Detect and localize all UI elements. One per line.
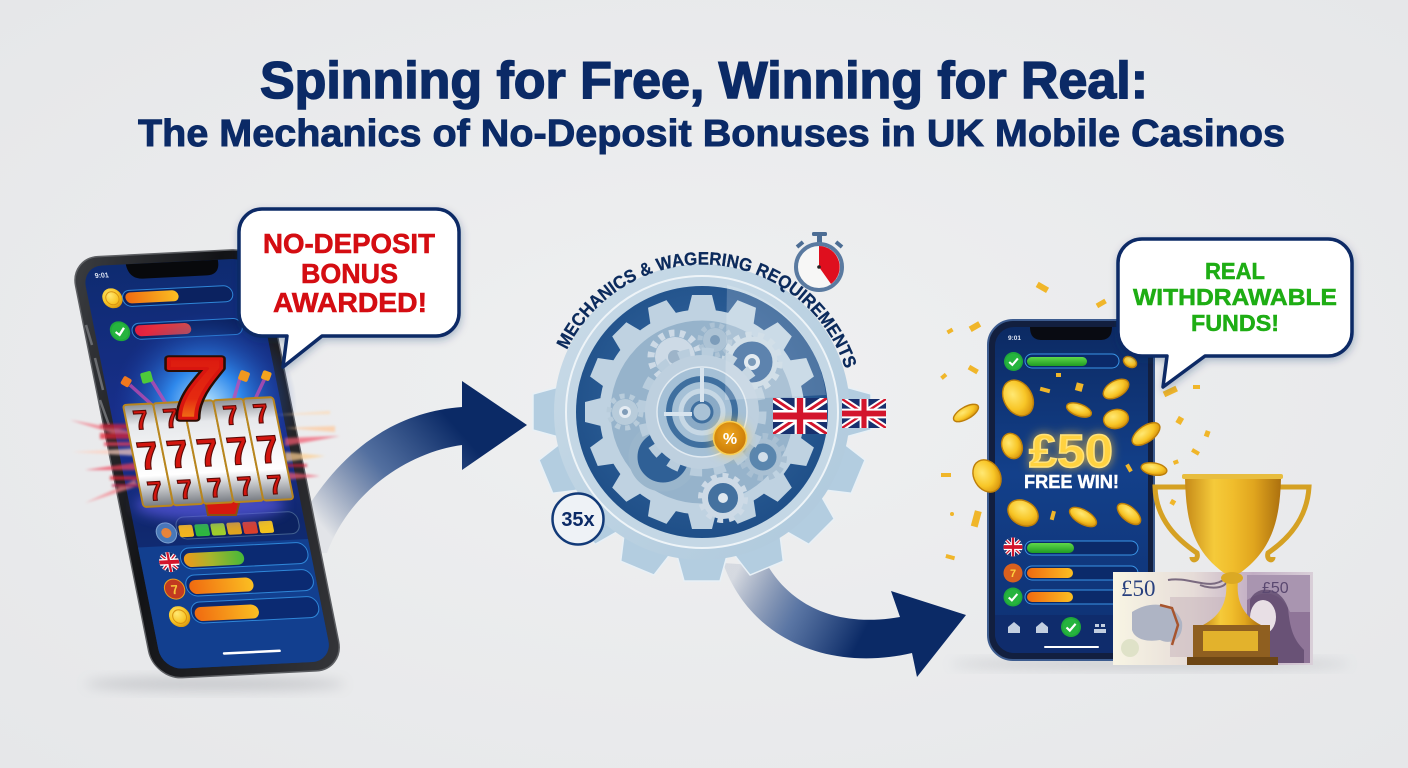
title line 1: Spinning for Free, Winning for Real: xyxy=(260,52,1148,110)
row: UK progress xyxy=(157,542,310,573)
gear bottom xyxy=(701,476,745,520)
big seven: 7 xyxy=(164,341,226,437)
notch xyxy=(1030,327,1112,340)
trophy cup xyxy=(1185,478,1281,573)
fruit tiles xyxy=(120,370,272,412)
trophy base xyxy=(1193,625,1270,658)
bubble text: FUNDS! xyxy=(1191,310,1279,336)
trophy plinth xyxy=(1187,657,1278,665)
reel sevens: 7 xyxy=(133,434,164,479)
banknote xyxy=(1113,572,1313,665)
row: seven progress: 7 xyxy=(170,582,180,597)
note map illustration xyxy=(1121,605,1182,657)
row: check progress xyxy=(108,315,244,342)
reel sevens: 7 xyxy=(205,472,226,503)
gear lower left xyxy=(633,427,693,487)
title line 2: The Mechanics of No-Deposit Bonuses in UK Mobile Casinos xyxy=(138,113,1285,155)
phone screen xyxy=(995,327,1148,653)
reel sevens: 7 xyxy=(193,431,224,476)
bottom nav band xyxy=(995,615,1148,653)
row: check orange progress xyxy=(1004,588,1138,606)
gear top xyxy=(700,325,730,355)
row: coin progress lower xyxy=(166,596,321,628)
curved label: MECHANICS & WAGERING REQUIREMENTS xyxy=(556,252,856,368)
bottom seven remnant xyxy=(205,500,240,515)
status time: 9:01 xyxy=(94,272,110,280)
prize amount: £50 xyxy=(1029,425,1113,477)
lower screen panel xyxy=(138,539,332,670)
gold coins xyxy=(951,354,1168,531)
phone shadow xyxy=(950,659,1350,669)
dark well xyxy=(576,286,828,538)
speech bubble: real funds xyxy=(1118,239,1352,387)
phone shadow xyxy=(85,677,345,691)
lower burst glow xyxy=(135,489,285,521)
reel sevens: 7 xyxy=(253,428,284,472)
row: coin progress xyxy=(100,282,234,309)
phone screen xyxy=(82,258,332,670)
glass highlight xyxy=(725,285,826,400)
row: symbol meter xyxy=(153,511,301,543)
central gear xyxy=(642,352,762,472)
large inner gear xyxy=(585,295,819,529)
confetti xyxy=(940,282,1211,560)
row: seven progress xyxy=(162,569,316,600)
bottom nav icons xyxy=(1008,617,1106,637)
bubble text: NO-DEPOSIT xyxy=(263,228,435,259)
gear left xyxy=(609,396,641,428)
gear: mechanics and wagering xyxy=(534,232,886,580)
note signature band xyxy=(1168,578,1227,588)
note amount right: £50 xyxy=(1262,580,1289,597)
35x badge: 35x xyxy=(561,509,595,531)
gear top left xyxy=(651,333,699,381)
phone casing xyxy=(70,248,344,679)
reel sevens: 7 xyxy=(235,470,256,502)
free win text: FREE WIN! xyxy=(1024,472,1119,492)
row: check progress xyxy=(1004,352,1119,371)
arrow: mechanics to winnings xyxy=(723,563,966,677)
arrow: phone to mechanics xyxy=(300,381,527,553)
home bar xyxy=(1044,646,1099,648)
reel sevens: 7 xyxy=(223,429,254,474)
reel sevens: 7 xyxy=(175,473,196,505)
bubble text: AWARDED! xyxy=(273,287,427,318)
UK flag large xyxy=(773,398,827,434)
row: seven progress: 7 xyxy=(1010,568,1016,580)
percent coin xyxy=(714,422,746,454)
note portrait xyxy=(1247,575,1310,663)
outer ring xyxy=(554,264,850,560)
reel sevens: 7 xyxy=(163,432,194,477)
small gears xyxy=(609,325,784,520)
bubble text: WITHDRAWABLE xyxy=(1133,284,1337,310)
side buttons xyxy=(86,325,109,425)
bubble text: BONUS xyxy=(301,258,398,289)
bubble text xyxy=(263,228,435,318)
note paper xyxy=(1113,572,1313,665)
bubble shape xyxy=(239,209,459,367)
gear lower right xyxy=(742,436,784,478)
trophy handles xyxy=(1155,487,1309,560)
reel sevens: 7 xyxy=(251,398,272,429)
left phone group xyxy=(70,248,345,691)
trophy plaque xyxy=(1203,631,1258,651)
phone tilted body xyxy=(70,248,344,679)
jackpot glow xyxy=(113,313,297,497)
status time: 9:01 xyxy=(1008,335,1021,342)
UK flag small xyxy=(842,399,886,428)
reel sevens: 7 xyxy=(265,469,286,500)
notch xyxy=(126,260,221,279)
gear top right xyxy=(725,335,779,389)
big seven: 7 xyxy=(164,341,226,437)
gear teeth xyxy=(533,386,871,581)
row: seven progress xyxy=(1004,564,1138,582)
reel sevens: 7 xyxy=(131,404,152,436)
reel sevens: 7 xyxy=(161,402,182,434)
bubble text xyxy=(1133,258,1337,336)
reel sevens: 7 xyxy=(221,399,242,431)
reel sevens: 7 xyxy=(145,475,166,507)
bubble text: REAL xyxy=(1205,258,1265,284)
bubble shape xyxy=(1118,239,1352,387)
row: UK progress xyxy=(1004,538,1138,556)
home bar xyxy=(223,649,281,655)
red energy streaks xyxy=(70,411,340,503)
slot reels xyxy=(123,397,293,507)
reel sevens xyxy=(127,398,289,507)
title xyxy=(138,52,1285,155)
speech bubble: no-deposit xyxy=(239,209,459,367)
reel drums xyxy=(123,397,293,507)
right phone group xyxy=(940,282,1350,669)
percent coin: % xyxy=(723,431,737,448)
trophy xyxy=(1155,474,1309,665)
stopwatch xyxy=(796,232,842,290)
note amount: £50 xyxy=(1121,576,1156,601)
35x badge xyxy=(552,494,604,544)
phone casing xyxy=(988,320,1154,660)
trophy stem xyxy=(1203,580,1261,625)
trophy rim xyxy=(1182,474,1283,479)
